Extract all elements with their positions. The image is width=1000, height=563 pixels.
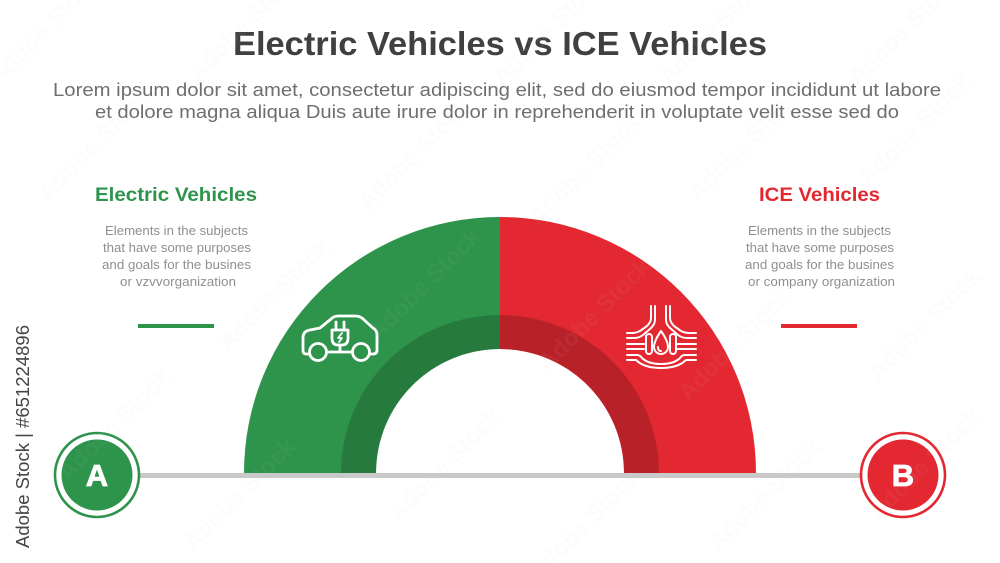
watermark pattern: Adobe Stock: [703, 433, 827, 556]
watermark pattern: Adobe Stock: [178, 433, 302, 556]
inner ring: electric: [341, 315, 500, 473]
watermark pattern: Adobe Stock: [683, 83, 807, 206]
stock credit: Adobe Stock | #651224896: [13, 325, 33, 548]
watermark pattern: Adobe Stock: [533, 253, 657, 376]
text block: ICE vehicles: that have some purposes: [746, 240, 894, 255]
watermark pattern: Adobe Stock: [363, 223, 487, 346]
title: Electric Vehicles vs ICE Vehicles: [233, 25, 767, 62]
text block: ICE vehicles: and goals for the busines: [745, 257, 894, 272]
text block: electric vehicles: or vzvvorganization: [120, 274, 236, 289]
watermark pattern: Adobe Stock: [673, 283, 797, 406]
subtitle text: Lorem ipsum dolor sit amet, consectetur adipiscing elit, sed do eiusmod tempor incididunt ut labore: [53, 79, 941, 100]
heading: ICE Vehicles: ICE Vehicles: [759, 185, 880, 206]
badge B: [861, 433, 945, 517]
accent line: ICE: [781, 324, 857, 328]
badge A: A: [86, 458, 108, 493]
subtitle text: et dolore magna aliqua Duis aute irure dolor in reprehenderit in voluptate velit esse sed do: [95, 101, 899, 122]
watermark pattern: Adobe Stock: [863, 263, 987, 386]
text block: ICE vehicles: or company organization: [748, 274, 895, 289]
watermark pattern: Adobe Stock: [383, 403, 507, 526]
segment: ICE vehicles: [500, 217, 756, 473]
watermark pattern: Adobe Stock: [853, 68, 977, 191]
text block: electric vehicles: and goals for the busines: [102, 257, 251, 272]
watermark pattern: Adobe Stock: [353, 93, 477, 216]
half-donut chart: [244, 217, 756, 473]
text block: electric vehicles: [102, 223, 251, 289]
watermark pattern: Adobe Stock: [523, 108, 647, 231]
text block: electric vehicles: that have some purposes: [103, 240, 251, 255]
watermark pattern: Adobe Stock: [213, 233, 337, 356]
icon: oil pipe with drop: [627, 306, 696, 368]
accent line: electric: [138, 324, 214, 328]
text block: ICE vehicles: Elements in the subjects: [748, 223, 891, 238]
subtitle text: [53, 79, 941, 122]
watermark pattern: Adobe Stock: [33, 83, 157, 206]
badge A: [55, 433, 139, 517]
text block: electric vehicles: Elements in the subjects: [105, 223, 248, 238]
heading: Electric Vehicles: Electric Vehicles: [95, 185, 257, 206]
icon: electric car: [303, 316, 377, 360]
segment: electric vehicles: [244, 217, 500, 473]
watermark pattern: Adobe Stock: [863, 403, 987, 526]
text block: ICE vehicles: [745, 223, 895, 289]
inner ring: ICE: [500, 315, 659, 473]
watermark pattern: Adobe Stock: [53, 363, 177, 486]
badge B: B: [892, 458, 914, 493]
baseline connector: [138, 473, 862, 478]
